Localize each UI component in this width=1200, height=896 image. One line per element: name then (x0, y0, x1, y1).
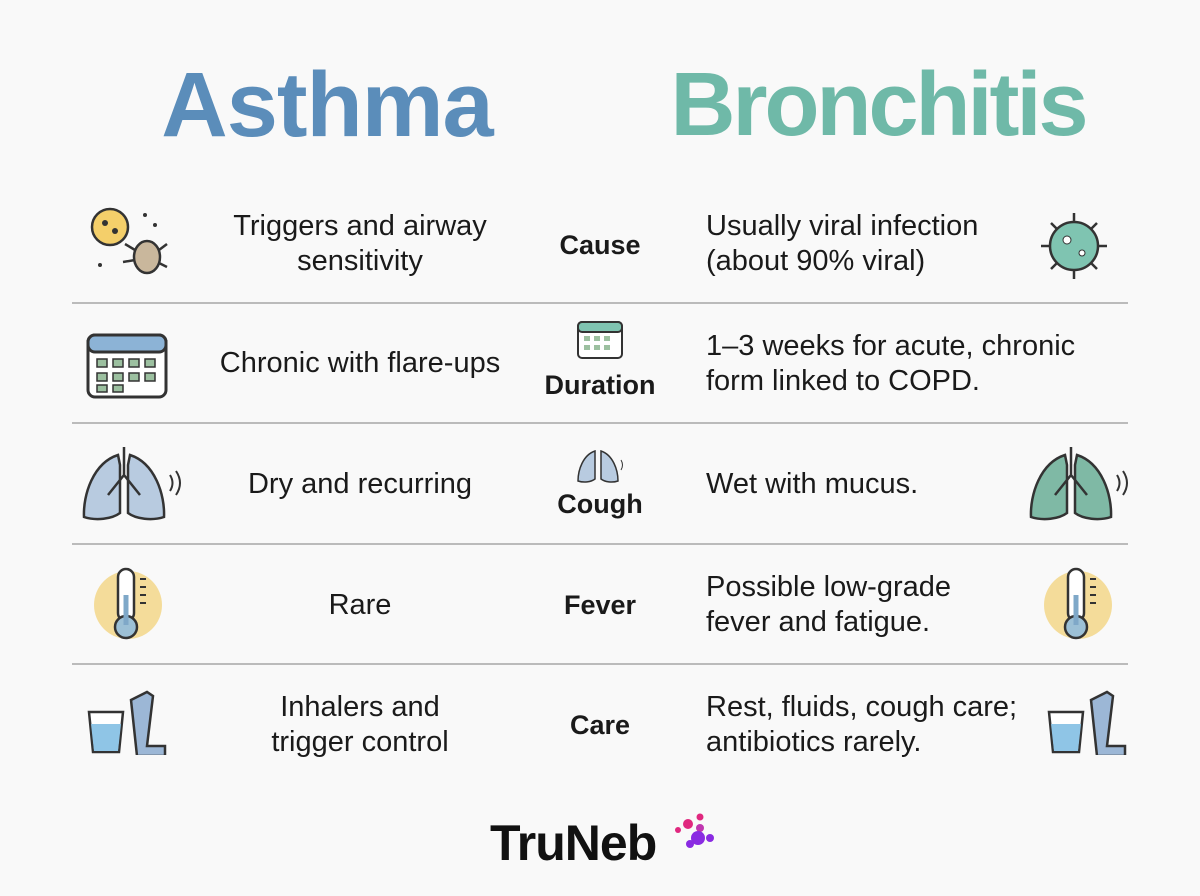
text: bronchitis care: antibiotics rarely. (706, 726, 921, 758)
text: asthma cough: Dry and recurring (248, 468, 472, 500)
label: Duration: Duration (544, 370, 656, 400)
icon: allergens (90, 208, 168, 274)
icon: thermometer right (1044, 568, 1112, 640)
text: asthma fever: Rare (329, 589, 391, 621)
text: bronchitis cause: Usually viral infection (706, 210, 978, 242)
text: bronchitis care: Rest, fluids, cough care; (706, 691, 1017, 723)
title: Bronchitis: Bronchitis (670, 55, 1086, 155)
label: Fever: Fever (564, 590, 636, 620)
text: bronchitis cough: Wet with mucus. (706, 468, 918, 500)
icon: calendar (86, 334, 168, 398)
label: Cough: Cough (557, 489, 643, 519)
text: asthma care: Inhalers and (280, 691, 440, 723)
text: asthma care: trigger control (271, 726, 449, 758)
icon: water and inhaler right (1048, 690, 1126, 755)
text: bronchitis fever: Possible low-grade (706, 571, 951, 603)
title: Asthma: Asthma (161, 54, 493, 156)
logo: TruNeb: TruNeb (490, 815, 656, 871)
icon: lungs green (1030, 447, 1128, 520)
text: bronchitis fever (706, 571, 951, 638)
icon: thermometer (94, 568, 162, 640)
label: Duration (544, 321, 656, 400)
icon: lungs blue (82, 447, 181, 520)
icon: small lungs (577, 450, 623, 483)
text: asthma cause: Triggers and airway sensitivity (233, 210, 487, 277)
label: Cause: Cause (559, 230, 641, 260)
icon: water and inhaler (88, 690, 166, 755)
label: Care: Care (570, 710, 630, 740)
icon: small calendar (577, 321, 623, 359)
icon: logo dots (675, 814, 714, 848)
text: asthma duration: Chronic with flare-ups (220, 347, 500, 379)
text: asthma care (271, 691, 449, 758)
text: bronchitis fever: fever and fatigue. (706, 606, 930, 638)
icon: virus (1041, 213, 1107, 279)
text: bronchitis duration: 1–3 weeks for acute, chronic form linked to COPD. (706, 330, 1075, 397)
label: Cough (557, 450, 643, 519)
text: bronchitis care (706, 691, 1017, 758)
text: bronchitis cause: (about 90% viral) (706, 245, 925, 277)
text: bronchitis cause (706, 210, 978, 277)
